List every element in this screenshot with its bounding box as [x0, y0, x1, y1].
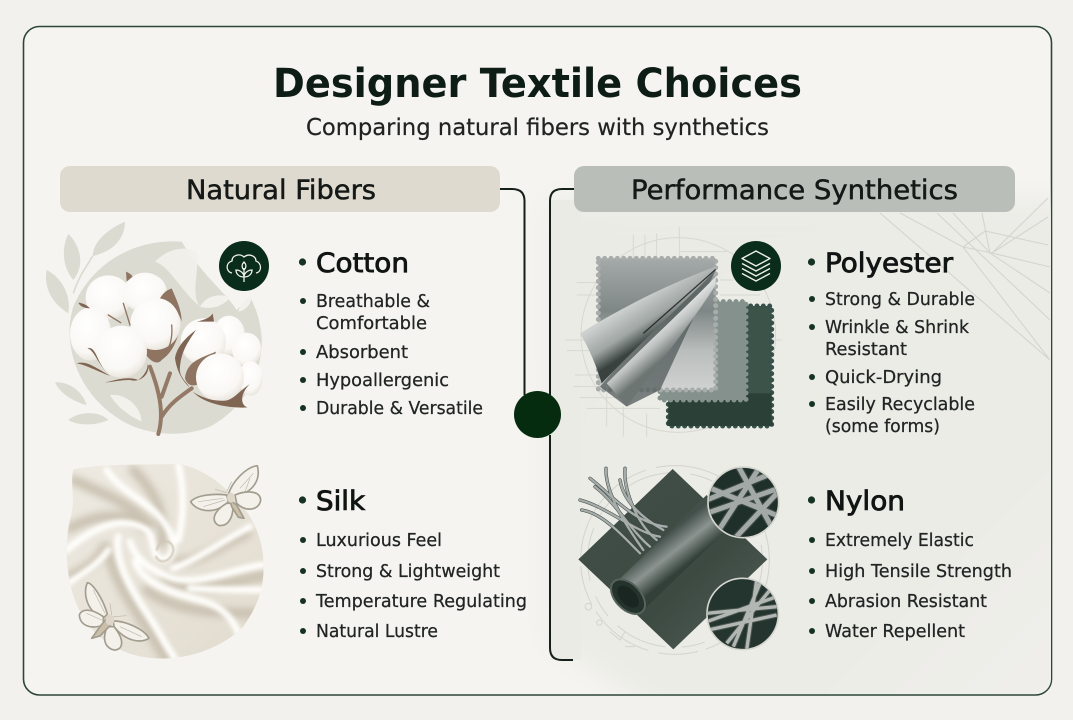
list: cotton	[300, 291, 483, 419]
list: nylon: High Tensile Strength	[825, 561, 1012, 582]
label: cotton: Cotton	[316, 248, 409, 279]
subtitle: Comparing natural fibers with synthetics	[306, 115, 769, 141]
list: polyester: Resistant	[825, 339, 907, 360]
list: cotton: Durable & Versatile	[316, 398, 483, 419]
swatch: dark green	[667, 306, 773, 426]
list: polyester: Easily Recyclable	[825, 394, 975, 415]
list: silk: Luxurious Feel	[316, 530, 442, 551]
swatch: mid gray	[660, 302, 746, 400]
illustration: cotton	[46, 222, 263, 434]
center node	[514, 391, 561, 438]
heading: natural fibers	[60, 166, 500, 212]
list: silk: Natural Lustre	[316, 621, 438, 642]
list: cotton: Absorbent	[316, 342, 408, 363]
list: silk: Temperature Regulating	[315, 591, 527, 612]
label: silk: Silk	[316, 486, 365, 517]
list: cotton: Comfortable	[316, 313, 427, 334]
icon: layers	[731, 241, 781, 291]
connector: right	[550, 189, 574, 660]
list: silk	[300, 530, 527, 642]
list: polyester	[809, 289, 975, 437]
decorative crack lines	[880, 198, 1050, 360]
swatch: light gray	[598, 258, 716, 390]
heading: natural fibers: Natural Fibers	[186, 175, 376, 206]
list: polyester: (some forms)	[825, 416, 940, 437]
heading: performance synthetics	[574, 166, 1015, 212]
list: polyester: Quick-Drying	[825, 367, 942, 388]
list: nylon	[809, 530, 1012, 642]
list: silk: Strong & Lightweight	[316, 561, 500, 582]
fold: upper blade	[580, 267, 716, 383]
list: polyester: Strong & Durable	[825, 289, 975, 310]
label: polyester: Polyester	[825, 248, 954, 279]
label: nylon: Nylon	[825, 486, 905, 517]
panel: synthetics background	[550, 200, 1073, 720]
list: nylon: Water Repellent	[825, 621, 965, 642]
illustration: nylon	[578, 463, 783, 654]
fold: lower blade	[607, 277, 716, 407]
heading: performance synthetics: Performance Synthetics	[631, 175, 958, 206]
title: Designer Textile Choices	[273, 61, 802, 107]
butterfly lower	[79, 583, 149, 650]
list: nylon: Extremely Elastic	[825, 530, 974, 551]
inset: bottom fibers	[707, 578, 778, 650]
list: polyester: Wrinkle & Shrink	[825, 317, 970, 338]
illustration: silk	[67, 464, 267, 660]
list: cotton: Hypoallergenic	[316, 370, 449, 391]
butterfly upper	[191, 466, 261, 526]
illustration: polyester	[565, 227, 782, 437]
connector: left	[500, 189, 524, 395]
list: nylon: Abrasion Resistant	[825, 591, 987, 612]
icon: cotton	[219, 241, 269, 291]
inset: top fibers	[707, 466, 780, 538]
list: cotton: Breathable &	[316, 291, 430, 312]
